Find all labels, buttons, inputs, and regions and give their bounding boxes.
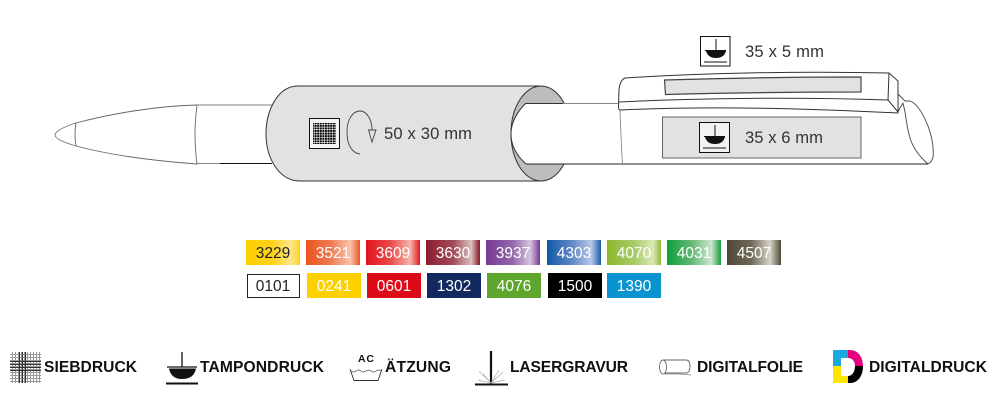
legend: Aetzung xyxy=(350,353,451,380)
colour swatches: first row: 4507 xyxy=(737,245,771,262)
label: 35 x 6 mm print area xyxy=(662,117,861,158)
icon: screen print box xyxy=(310,118,340,148)
rear barrel and cap xyxy=(511,72,933,164)
colour swatches: second row: 1500 xyxy=(558,278,593,295)
colour swatches: first row: 4303 xyxy=(557,245,591,262)
colour swatches: first row xyxy=(246,240,781,265)
colour swatches: second row xyxy=(248,273,661,298)
legend: Lasergravur xyxy=(475,351,628,384)
icon: pad print top xyxy=(700,36,730,66)
legend: Digitalfolie: DIGITALFOLIE xyxy=(697,359,803,376)
wrap-around print area xyxy=(266,86,571,181)
legend: Digitaldruck xyxy=(833,350,988,383)
legend: Siebdruck xyxy=(10,352,138,383)
legend: Aetzung: AC xyxy=(358,353,374,365)
colour swatches: second row: 0101 xyxy=(256,278,290,295)
pen tip and cone xyxy=(55,105,197,164)
dimension: 50 x 30 mm: 50 x 30 mm xyxy=(384,124,472,143)
legend: Siebdruck: SIEBDRUCK xyxy=(44,359,138,376)
legend: Tampondruck xyxy=(166,352,325,384)
icon: rotation arrow xyxy=(347,111,376,154)
colour swatches: first row: 3609 xyxy=(376,245,410,262)
legend: Tampondruck: TAMPONDRUCK xyxy=(200,359,325,376)
icon: pad print body xyxy=(700,122,730,152)
colour swatches: first row: 3937 xyxy=(496,245,530,262)
pen illustration xyxy=(55,72,933,181)
dimension: 35 x 5 mm: 35 x 5 mm xyxy=(745,42,824,61)
colour swatches: second row: 0241 xyxy=(317,278,351,295)
colour swatches: first row: 3521 xyxy=(316,245,350,262)
label: 35 x 5 mm print area xyxy=(664,77,861,94)
colour swatches: first row: 4070 xyxy=(617,245,652,262)
colour swatches: second row: 4076 xyxy=(497,278,531,295)
colour swatches: second row: 0601 xyxy=(377,278,411,295)
colour swatches: first row: 3229 xyxy=(256,245,290,262)
front barrel xyxy=(197,105,272,164)
legend: Digitaldruck: DIGITALDRUCK xyxy=(869,359,988,376)
legend: Aetzung: ÄTZUNG xyxy=(385,358,451,376)
colour swatches: first row: 4031 xyxy=(677,245,711,262)
colour swatches: second row: 1302 xyxy=(437,278,471,295)
dimension: 35 x 6 mm: 35 x 6 mm xyxy=(745,128,823,147)
colour swatches: first row: 3630 xyxy=(436,245,471,262)
colour swatches: second row: 1390 xyxy=(617,278,652,295)
legend: Lasergravur: LASERGRAVUR xyxy=(510,359,628,376)
